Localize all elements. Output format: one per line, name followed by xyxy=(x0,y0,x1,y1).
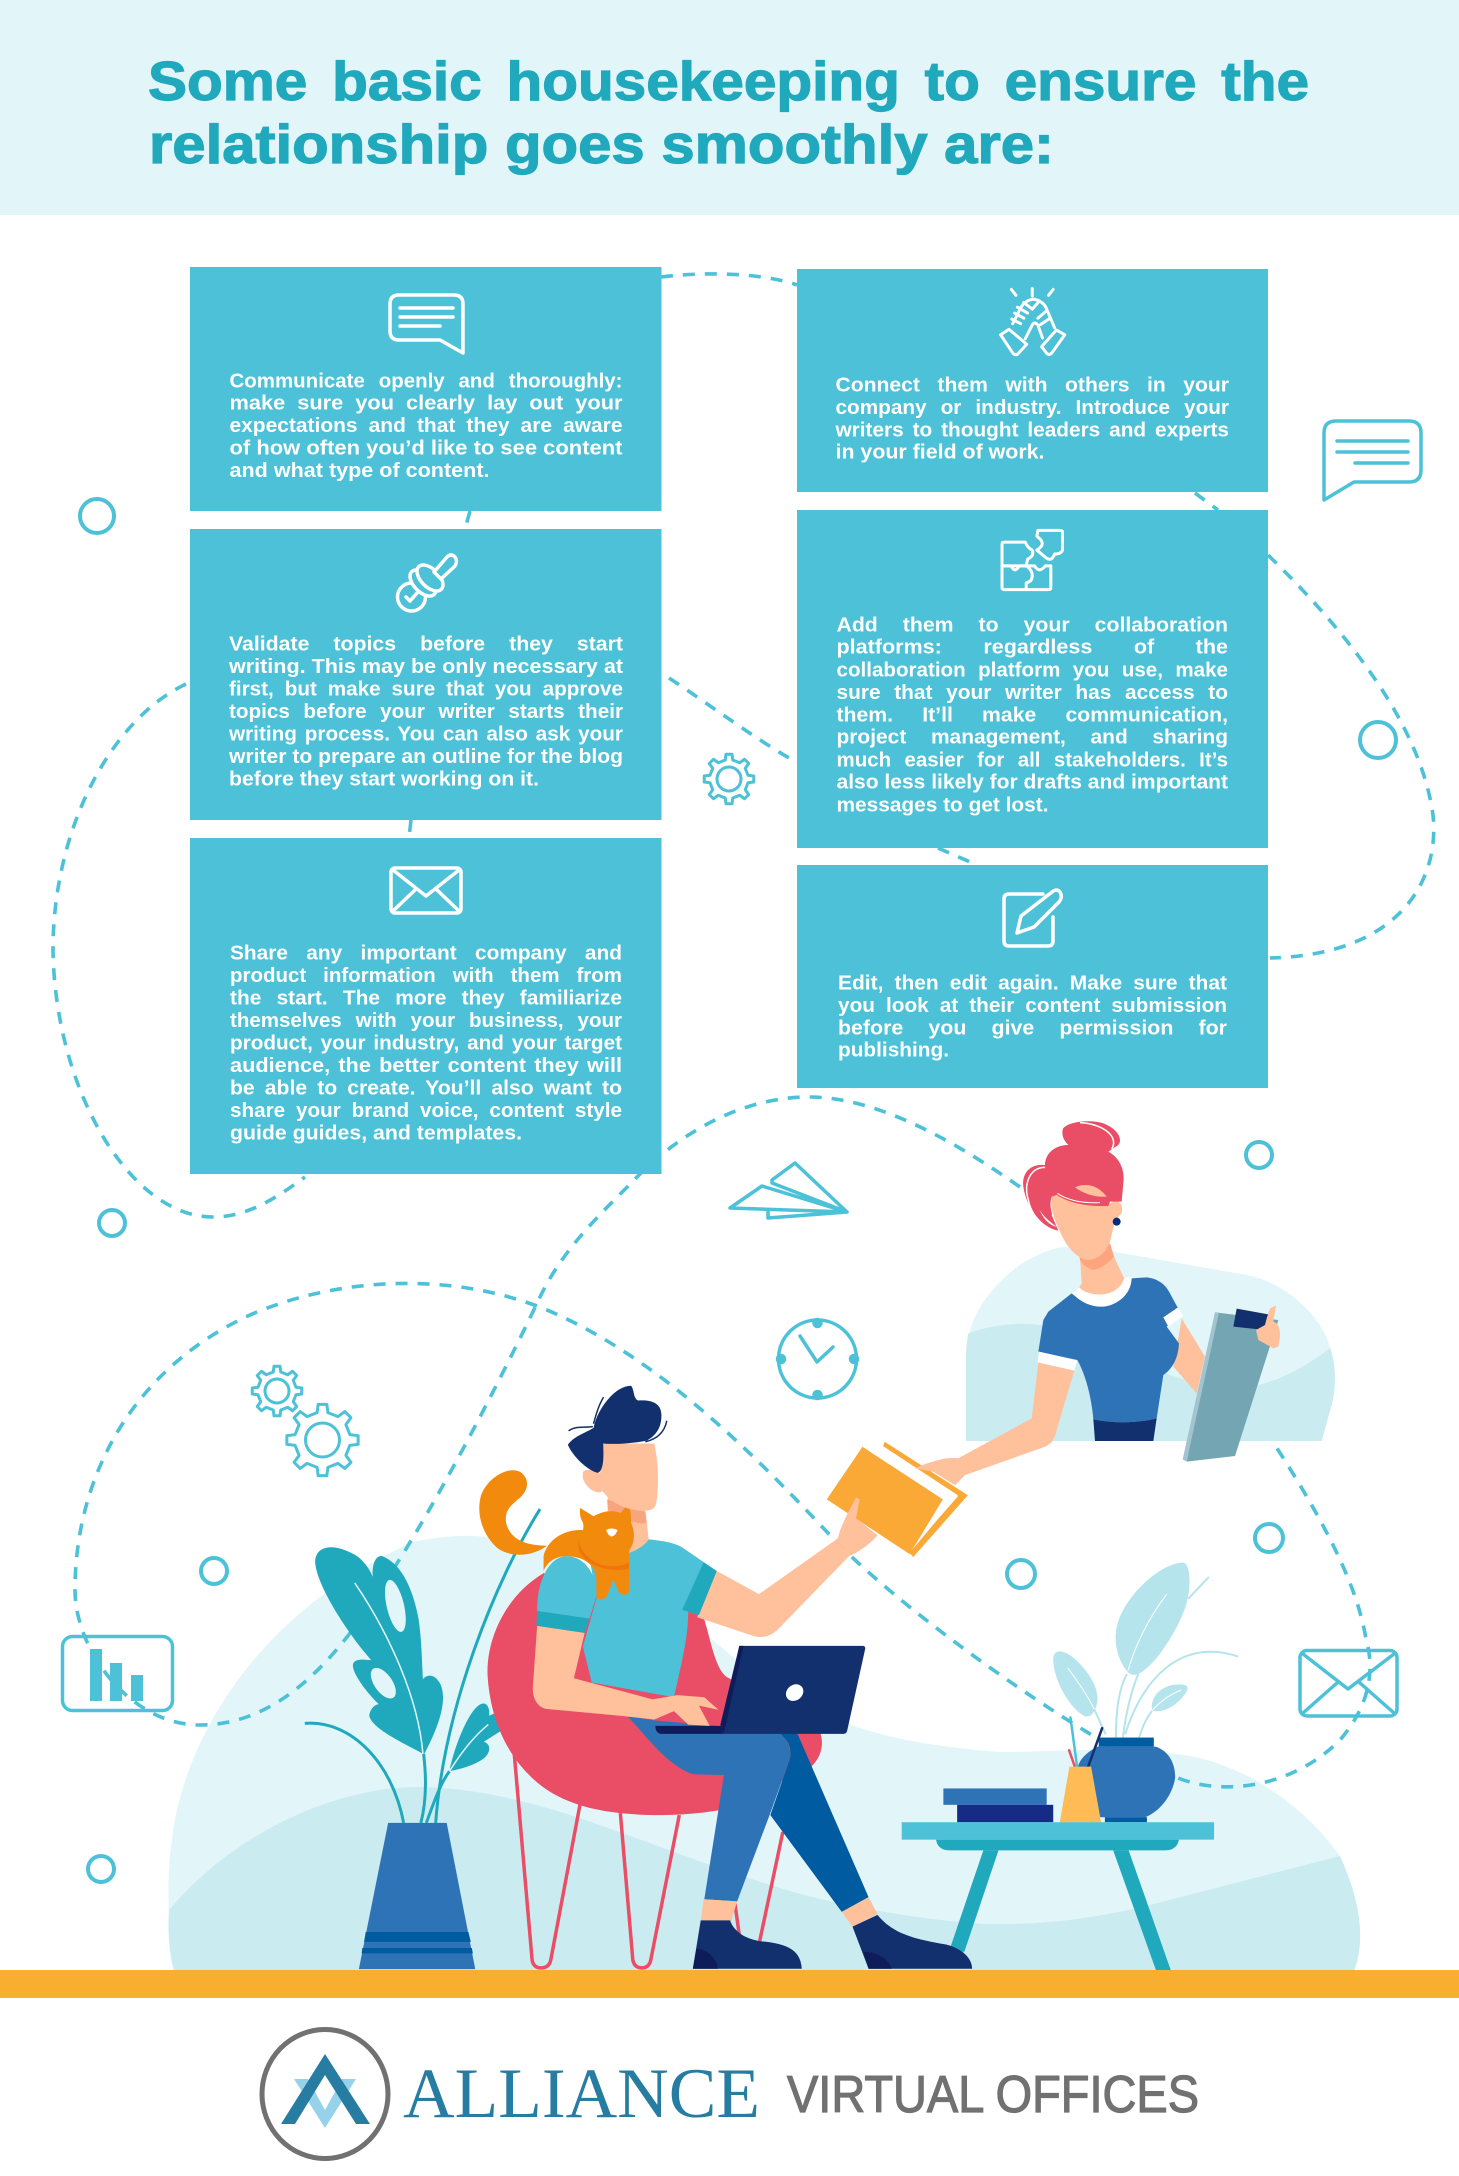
text: collaboration: messages to get lost. xyxy=(836,794,1048,816)
cat head xyxy=(579,1505,634,1570)
raised arm xyxy=(697,1539,849,1637)
title xyxy=(148,50,1309,175)
decorative outline circles xyxy=(80,499,1396,1882)
text: share: be able to create. You’ll also want to xyxy=(230,1078,622,1100)
text: collaboration: collaboration platform you use, make xyxy=(836,660,1228,682)
folder xyxy=(827,1442,968,1557)
illustration: side table with vase xyxy=(902,1563,1238,1971)
text: edit xyxy=(838,972,1227,1062)
text: connect: company or industry. Introduce your xyxy=(836,397,1229,419)
logo: Alliance Virtual Offices xyxy=(262,2030,1199,2158)
text: communicate: of how often you’d like to see content xyxy=(230,438,623,460)
panel: share company information xyxy=(190,838,662,1174)
shirt right cuff xyxy=(682,1563,717,1615)
far ankle xyxy=(842,1897,877,1927)
text: connect xyxy=(834,374,1229,464)
vase xyxy=(1078,1738,1175,1822)
dashed connector lines xyxy=(53,274,1434,1787)
plant stems xyxy=(305,1509,540,1823)
text: collaboration: also less likely for drafts and important xyxy=(836,772,1228,794)
text: share: the start. The more they familiarize xyxy=(230,988,622,1010)
laptop base xyxy=(655,1726,724,1734)
neck xyxy=(607,1493,649,1554)
text: collaboration: project management, and sharing xyxy=(836,726,1228,748)
panel: validate topics xyxy=(190,529,662,820)
background hill dark xyxy=(169,1787,1360,1971)
near leg xyxy=(627,1716,790,1901)
text: validate xyxy=(228,634,623,790)
face xyxy=(1051,1195,1122,1260)
text: connect: in your field of work. xyxy=(836,442,1044,464)
text: communicate xyxy=(230,370,623,482)
text: validate: before they start working on it. xyxy=(229,768,539,790)
blob light xyxy=(966,1247,1335,1441)
text: communicate: Communicate openly and thoroughly: xyxy=(230,370,622,392)
title: relationship goes smoothly are: xyxy=(149,113,1054,175)
hair xyxy=(568,1386,667,1473)
laptop lid xyxy=(720,1646,865,1734)
pen holder xyxy=(1060,1767,1101,1822)
icon: puzzle xyxy=(1002,530,1062,590)
text: validate: Validate topics before they start xyxy=(229,634,623,656)
logo emblem xyxy=(262,2030,388,2158)
text: share: guide guides, and templates. xyxy=(230,1122,522,1144)
panel: communicate openly xyxy=(190,267,662,511)
icon: edit pencil xyxy=(1004,890,1061,946)
cat tail xyxy=(479,1470,547,1555)
text: collaboration: platforms: regardless of the xyxy=(836,636,1228,658)
title: Some basic housekeeping to ensure the xyxy=(148,50,1309,112)
text: validate: writer to prepare an outline for the blog xyxy=(228,746,623,768)
shirt xyxy=(583,1539,717,1697)
pot xyxy=(359,1823,475,1969)
icon: envelope outline xyxy=(1300,1650,1397,1716)
icon: bar chart xyxy=(62,1636,172,1710)
text: collaboration xyxy=(836,614,1228,816)
text: share xyxy=(230,942,622,1144)
text: communicate: and what type of content. xyxy=(230,460,490,482)
lower arm and hand xyxy=(533,1626,719,1726)
background hill light xyxy=(168,1536,1360,1971)
woman's hand over folder xyxy=(915,1441,1053,1485)
small leaf xyxy=(449,1703,510,1771)
near ankle xyxy=(701,1899,737,1922)
books xyxy=(943,1788,1053,1822)
icon: gears pair xyxy=(252,1366,358,1476)
holding hand xyxy=(836,1497,877,1556)
text: edit: you look at their content submission xyxy=(838,995,1227,1017)
chair legs xyxy=(514,1754,783,1968)
torso xyxy=(1038,1277,1182,1422)
blob dark xyxy=(966,1324,1335,1441)
illustration: man on chair with laptop and cat xyxy=(479,1386,972,1969)
head xyxy=(583,1443,658,1511)
text: connect: writers to thought leaders and experts xyxy=(834,420,1229,442)
text: validate: first, but make sure that you approve xyxy=(229,678,623,700)
logo wordmark: ALLIANCE xyxy=(403,2055,760,2133)
neck xyxy=(1077,1243,1132,1303)
text: collaboration: much easier for all stakeholders. It’s xyxy=(836,749,1228,771)
illustration: left potted plant xyxy=(305,1509,540,1969)
text: share: Share any important company and xyxy=(230,942,622,964)
icon: envelope xyxy=(391,868,461,913)
table xyxy=(902,1822,1214,1971)
panel: connect them xyxy=(797,269,1268,492)
icon: pin with check xyxy=(398,555,456,611)
far leg xyxy=(770,1733,869,1912)
header band xyxy=(0,0,1459,215)
text: collaboration: sure that your writer has access to xyxy=(836,682,1228,704)
text: share: product, your industry, and your target xyxy=(230,1032,622,1054)
text: share: themselves with your business, your xyxy=(230,1010,622,1032)
sleeve cuff xyxy=(536,1611,589,1633)
shoes xyxy=(693,1915,972,1969)
chair seat xyxy=(487,1573,822,1815)
icon: speech bubble xyxy=(390,295,463,353)
panel: collaboration platforms xyxy=(797,510,1268,848)
icon: handshake xyxy=(1001,289,1065,355)
vase plant xyxy=(1053,1563,1238,1738)
icon: paper plane xyxy=(730,1163,847,1218)
pens xyxy=(1069,1717,1102,1766)
text: edit: before you give permission for xyxy=(838,1018,1227,1040)
text: share: audience, the better content they will xyxy=(230,1055,622,1077)
text: validate: writing process. You can also ask your xyxy=(228,724,623,746)
near arm xyxy=(915,1363,1074,1485)
text: communicate: make sure you clearly lay out your xyxy=(230,392,623,414)
cat body xyxy=(544,1527,629,1599)
icon: clock xyxy=(778,1320,858,1398)
logo tagline: VIRTUAL OFFICES xyxy=(787,2066,1199,2124)
illustration: woman with clipboard xyxy=(915,1121,1335,1485)
text: share: product information with them from xyxy=(230,965,622,987)
icon: chat bubble outline xyxy=(1324,421,1421,500)
text: collaboration: Add them to your collaboration xyxy=(836,614,1228,636)
orange floor band xyxy=(0,1970,1459,1998)
hair xyxy=(1023,1121,1124,1231)
collar and cuffs xyxy=(1038,1277,1183,1371)
earring xyxy=(1113,1218,1121,1226)
text: communicate: expectations and that they are aware xyxy=(230,415,622,437)
panel: edit again xyxy=(797,865,1268,1088)
large leaf xyxy=(315,1547,443,1754)
text: edit: Edit, then edit again. Make sure that xyxy=(838,972,1227,994)
text: edit: publishing. xyxy=(838,1040,949,1062)
icon: gear right of panels xyxy=(704,754,754,804)
far arm xyxy=(1173,1318,1205,1393)
shirt sleeve xyxy=(537,1556,596,1619)
text: share: share your brand voice, content style xyxy=(230,1100,622,1122)
text: validate: writing. This may be only necessary at xyxy=(228,656,623,678)
clipboard xyxy=(1183,1306,1280,1462)
waist xyxy=(1093,1418,1157,1441)
text: connect: Connect them with others in your xyxy=(836,374,1229,396)
text: collaboration: them. It’ll make communication, xyxy=(836,704,1228,726)
text: validate: topics before your writer starts their xyxy=(229,701,623,723)
